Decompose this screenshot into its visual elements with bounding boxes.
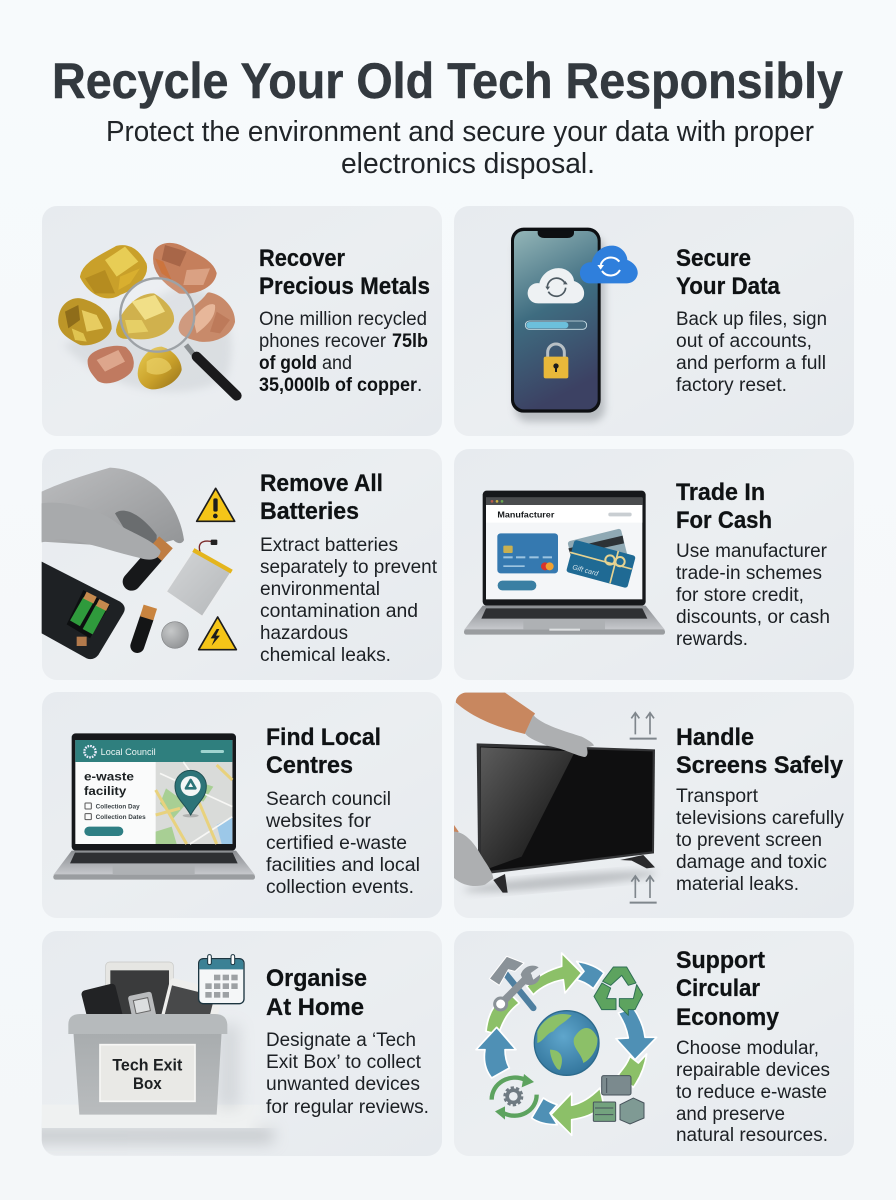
gold nugget smooth [138,347,182,389]
warning triangle [197,488,235,521]
body text: 75lb [392,331,428,352]
body text: natural resources. [676,1125,828,1146]
illustration: phone with cloud backup and padlock [511,228,638,422]
padlock [544,344,568,378]
upward arrows top [630,713,657,739]
laptop lid [72,733,236,851]
heading: Circular [676,975,760,1002]
gift cards: Gift card [571,564,600,578]
gold nugget top [83,247,144,296]
body text: factory reset. [676,375,787,396]
panel: find local centres [42,692,442,918]
illustration: tech exit box on shelf [27,955,282,1143]
body text: phones recover [259,331,387,352]
illustration: gloved hands carrying television [454,693,657,903]
AA battery [137,607,150,646]
body text: of gold [259,353,317,374]
upward arrows bottom [630,876,657,903]
panel: secure your data [454,206,854,436]
manufacturer label: Manufacturer [497,510,555,520]
gloved thumb [42,503,161,560]
body text: for regular reviews. [266,1097,429,1118]
location pin [175,770,206,817]
body text: Transport [676,786,759,807]
upper glove [525,715,594,757]
site name: Local Council [101,747,156,757]
laptop lid [483,491,646,606]
heading: For Cash [676,507,772,534]
body text: Choose modular, [676,1038,819,1059]
body text: facilities and local [266,855,420,876]
recycle symbol [594,967,643,1015]
pay button [498,581,536,590]
body text: websites for [265,811,372,832]
panel: recover precious metals [42,206,442,436]
hammer and wrench [489,956,540,1010]
cloud on screen [528,268,584,303]
heading: Remove All [260,470,383,497]
blue cloud [580,246,638,283]
body text: certified e-waste [266,833,407,854]
laptop base [464,606,665,635]
illustration: metal nuggets and magnifying glass [61,245,237,396]
body text: material leaks. [676,874,799,895]
heading: Screens Safely [676,752,844,779]
hazard triangle [199,617,236,650]
body text: and perform a full [676,353,826,374]
body text: and preserve [676,1104,785,1125]
illustration: laptop with council map [53,733,255,880]
phone [511,228,601,413]
copper nugget right [181,295,232,339]
television [477,743,655,893]
phone with batteries [42,562,125,659]
magnifying glass [120,278,237,396]
box [68,1014,227,1115]
panel: handle screens safely [454,692,854,918]
electronic components [593,1076,644,1124]
body text: discounts, or cash [676,607,830,628]
loop arrows [476,953,657,1135]
body text: and [322,353,352,374]
heading: Find Local [266,724,381,751]
progress bar [525,321,587,329]
body text: Designate a ‘Tech [266,1030,416,1051]
heading: Your Data [676,273,781,300]
body text: to prevent screen [676,830,822,851]
panel: organise at home [27,931,442,1156]
devices in box [81,962,224,1052]
body text: damage and toxic [676,852,827,873]
body text: televisions carefully [676,808,844,829]
gold nugget left [61,301,109,343]
body text: chemical leaks. [260,645,391,666]
copper nugget small [90,348,131,381]
heading: Precious Metals [259,273,430,300]
panel: trade in for cash [454,449,854,680]
illustration: laptop with gift cards [464,491,665,635]
body text: to reduce e-waste [676,1082,827,1103]
cylinder battery [132,542,166,582]
body text: collection events. [266,877,414,898]
facility heading: e-waste [84,770,134,784]
heading: Economy [676,1004,780,1031]
body text: separately to prevent [260,557,438,578]
box label: Tech Exit [112,1056,183,1075]
body text: rewards. [676,629,748,650]
copper nugget top [155,245,214,291]
lower glove [454,825,493,886]
arm [456,693,535,734]
heading: Batteries [260,498,359,525]
heading: Support [676,947,765,974]
title: Recycle Your Old Tech Responsibly [52,53,843,109]
body text: repairable devices [676,1060,830,1081]
hand back and fingers [42,468,184,552]
coin battery [162,622,188,648]
calendar [199,955,244,1004]
collection details: Collection Dates [96,814,146,821]
shelf [42,1124,277,1149]
body text: . [417,375,422,396]
heading: At Home [266,994,364,1021]
gold nugget centre [119,295,171,337]
body text: One million recycled [259,309,427,330]
body text: 35,000lb of copper [259,375,418,396]
box label: Box [133,1074,162,1093]
panel: remove all batteries [42,449,442,680]
body text: Back up files, sign [676,309,827,330]
heading: Secure [676,245,751,272]
body text: trade-in schemes [676,563,822,584]
heading: Organise [266,965,367,992]
heading: Handle [676,724,754,751]
map [156,762,232,844]
heading: Trade In [676,479,765,506]
credit card [497,533,558,573]
lithium pouch battery [166,540,232,617]
panel: support circular economy [454,931,854,1156]
body text: for store credit, [676,585,804,606]
subtitle: Protect the environment and secure your data with proper [106,116,814,148]
body text: Use manufacturer [676,541,828,562]
body text: Extract batteries [260,535,398,556]
subtitle: electronics disposal. [341,148,595,180]
illustration: gloved hand and batteries [42,468,236,659]
body text: Search council [266,789,391,810]
body text: environmental [260,579,380,600]
heading: Recover [259,245,345,272]
collection details [85,803,146,821]
button [84,827,123,836]
illustration: circular economy loop [476,953,657,1135]
gear loop [492,1074,537,1120]
facility heading: facility [84,784,127,798]
body text: unwanted devices [266,1074,420,1095]
collection details: Collection Day [96,803,140,810]
body text: Exit Box’ to collect [266,1052,422,1073]
body text: contamination and [260,601,418,622]
body text: out of accounts, [676,331,812,352]
gift cards [566,528,636,588]
laptop base [53,851,255,880]
heading: Centres [266,752,353,779]
globe [534,1011,599,1075]
body text: hazardous [260,623,348,644]
